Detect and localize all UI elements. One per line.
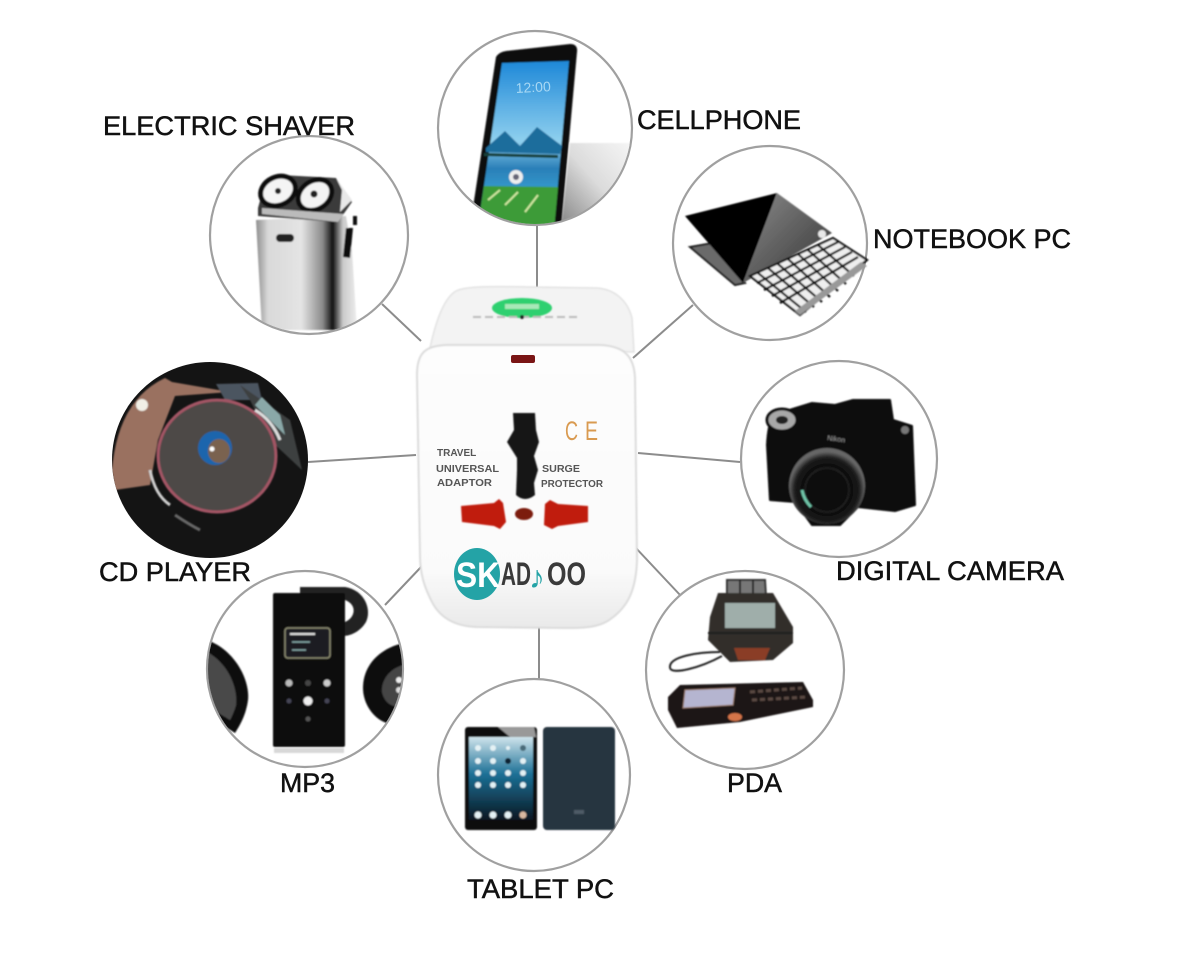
panel: cd player: [112, 362, 308, 558]
icon: tablet back: [543, 727, 615, 830]
surge label: [541, 464, 604, 490]
logo SKADOO: OO: [547, 556, 586, 592]
panel: mp3: [207, 571, 404, 767]
socket pin left: [461, 499, 506, 529]
indicator light: [511, 355, 535, 363]
panel: electric shaver: [210, 136, 408, 334]
icon: cellphone: [472, 42, 630, 224]
label: digital camera: DIGITAL CAMERA: [836, 556, 1064, 586]
icon: camera: Nikon: [827, 435, 846, 444]
label: tablet pc: TABLET PC: [467, 874, 614, 904]
socket slot: [507, 413, 539, 499]
panel: pda: [646, 571, 844, 769]
surge label: SURGE: [542, 464, 580, 475]
adaptor label: TRAVEL: [437, 448, 476, 459]
logo SKADOO: ♪: [529, 559, 545, 595]
label: pda: PDA: [727, 768, 782, 798]
label: electric shaver: ELECTRIC SHAVER: [103, 111, 355, 141]
surge label: PROTECTOR: [541, 479, 604, 490]
logo SKADOO: SK: [456, 556, 500, 595]
label: notebook pc: NOTEBOOK PC: [873, 224, 1071, 254]
socket pin right: [544, 500, 588, 529]
phone clock: 12:00: [515, 78, 551, 96]
panel: digital camera: [741, 361, 937, 557]
adaptor label: UNIVERSAL: [436, 464, 499, 475]
label: cd player: CD PLAYER: [99, 557, 251, 587]
logo SKADOO: [454, 548, 586, 600]
CE mark: E: [585, 416, 598, 446]
icon: shaver: [256, 171, 357, 330]
label: cellphone: CELLPHONE: [637, 105, 801, 135]
power switch: [473, 298, 578, 319]
panel: notebook pc: [673, 146, 867, 340]
icon: mp3 player: [207, 587, 404, 753]
adaptor label: [436, 448, 499, 489]
panel: tablet pc: [438, 679, 630, 871]
adaptor rear body: [430, 287, 634, 352]
panel: universal travel adaptor: [417, 287, 637, 628]
icon: tablet front: [465, 727, 537, 830]
label: mp3: MP3: [280, 768, 335, 798]
CE mark: C: [565, 416, 578, 446]
logo SKADOO: AD: [501, 556, 531, 592]
icon: cd player: [112, 378, 302, 530]
CE mark: [565, 416, 598, 446]
icon: pda devices: [668, 580, 813, 728]
connector lines: [308, 224, 740, 679]
panel: cellphone: [438, 31, 632, 240]
adaptor front face: [417, 345, 637, 628]
adaptor label: ADAPTOR: [437, 478, 493, 489]
icon: camera: [767, 400, 915, 525]
icon: notebook: [685, 193, 867, 315]
socket centre hole: [515, 508, 533, 520]
